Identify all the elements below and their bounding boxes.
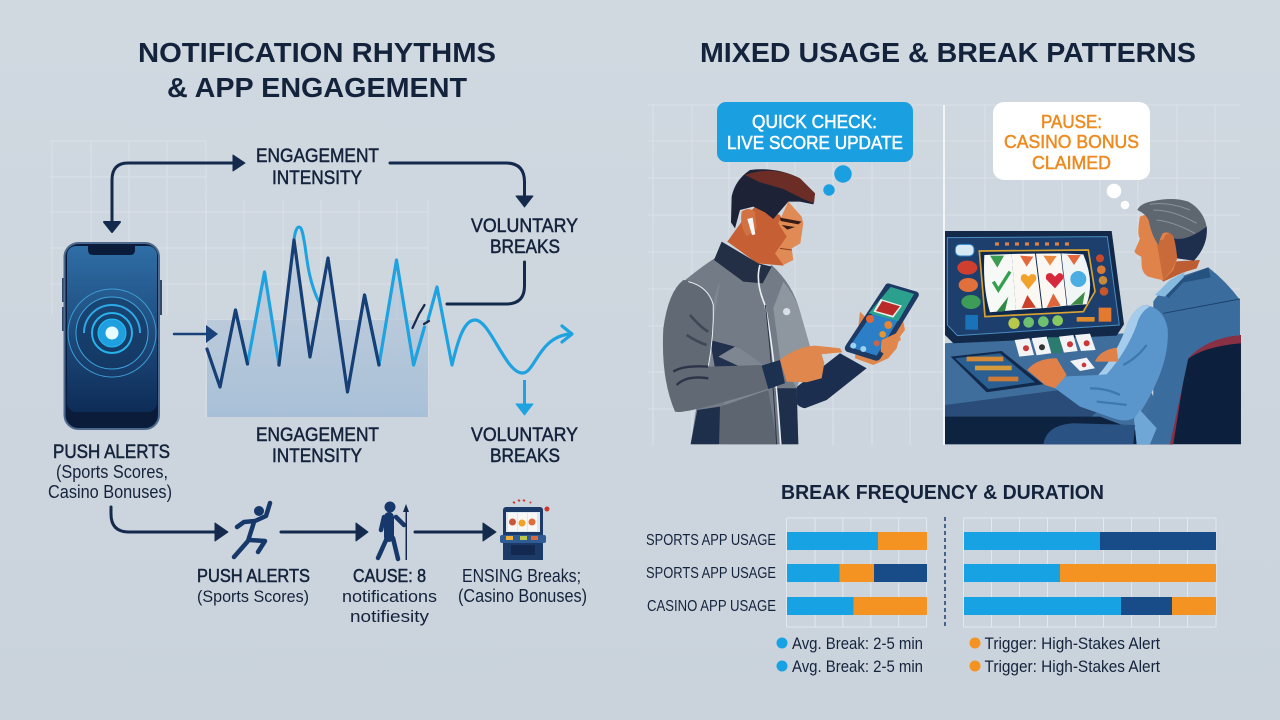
legend: average break: Avg. Break: 2-5 min xyxy=(792,634,923,653)
callout: pause casino bonus: PAUSE: xyxy=(1041,111,1102,132)
tablet keypad xyxy=(951,351,1043,392)
label: voluntary breaks top: VOLUNTARY xyxy=(471,216,578,237)
caption: push alerts: (Sports Scores) xyxy=(197,587,309,606)
caption: ensuing breaks: ENSING Breaks; xyxy=(462,566,581,586)
eyebrow and eye xyxy=(780,218,802,230)
zip xyxy=(758,265,781,444)
title: notification rhythms: & APP ENGAGEMENT xyxy=(167,72,467,103)
label: voluntary breaks top xyxy=(471,216,578,258)
face lit xyxy=(775,202,803,265)
shirt arm xyxy=(1055,305,1168,420)
caption: push alerts: PUSH ALERTS xyxy=(197,566,310,586)
caption: ensuing breaks: (Casino Bonuses) xyxy=(458,586,587,606)
far arm xyxy=(795,353,867,408)
badge xyxy=(783,308,790,315)
ear xyxy=(741,209,757,237)
label: engagement intensity bottom xyxy=(256,425,379,467)
torso xyxy=(683,255,810,444)
callout: quick check: QUICK CHECK: xyxy=(752,111,877,132)
arrow: down to voluntary breaks xyxy=(516,380,533,415)
panel grid: mixed usage backdrop xyxy=(648,105,1240,445)
face xyxy=(1134,212,1178,280)
callout: quick check xyxy=(717,102,913,196)
label: engagement intensity bottom: INTENSITY xyxy=(272,446,362,467)
chart grid: phone backdrop xyxy=(50,141,206,315)
arrow: engagement intensity to voluntary breaks xyxy=(390,163,533,207)
caption: push alerts xyxy=(197,566,310,606)
callout: pause casino bonus: CASINO BONUS xyxy=(1004,131,1139,152)
hair xyxy=(731,169,815,228)
caption: cause: notifications xyxy=(342,587,437,606)
label: push alerts under phone: Casino Bonuses) xyxy=(48,482,172,502)
icon: smartphone with alert rings xyxy=(62,243,162,429)
collar xyxy=(714,242,772,283)
hands xyxy=(1027,358,1067,388)
title: notification rhythms xyxy=(138,37,496,103)
monitor xyxy=(945,231,1124,343)
reels xyxy=(979,250,1095,317)
icon: standing person with staff xyxy=(378,502,409,560)
arrow: phone to chart xyxy=(174,325,218,343)
illustration: man checking phone xyxy=(663,169,919,444)
label: voluntary breaks bottom: VOLUNTARY xyxy=(471,425,578,446)
chair xyxy=(1167,335,1241,444)
chart grid: engagement backdrop xyxy=(206,200,428,417)
icon: slot machine xyxy=(500,500,550,560)
illustration: man at casino screen xyxy=(945,199,1241,444)
side buttons xyxy=(955,244,974,256)
arrow: alerts to runner xyxy=(111,507,228,541)
wristband xyxy=(762,360,785,389)
label: voluntary breaks top: BREAKS xyxy=(490,237,560,258)
bar chart: right duration xyxy=(964,518,1216,627)
pointing hand xyxy=(780,346,842,382)
neck and cheek xyxy=(727,207,790,266)
arrow: voluntary breaks return line xyxy=(447,262,524,304)
lower torso shade xyxy=(710,340,743,368)
bar chart: row labels: SPORTS APP USAGE xyxy=(646,565,776,582)
legend: trigger: Trigger: High-Stakes Alert xyxy=(984,657,1160,676)
icon: runner xyxy=(234,503,270,557)
bar chart: row labels xyxy=(646,532,776,615)
fingers over phone xyxy=(881,332,901,357)
legend: average break xyxy=(776,634,923,676)
bar chart: left frequency xyxy=(786,518,927,627)
label: push alerts under phone: (Sports Scores, xyxy=(56,462,168,482)
legend: trigger: Trigger: High-Stakes Alert xyxy=(984,634,1160,653)
bar chart: row labels: CASINO APP USAGE xyxy=(647,598,776,615)
label: engagement intensity top xyxy=(256,146,379,189)
callout: pause casino bonus xyxy=(993,102,1150,209)
arrow: loop from phone to engagement intensity xyxy=(104,155,245,232)
callout: pause casino bonus: CLAIMED xyxy=(1032,152,1111,173)
label: voluntary breaks bottom xyxy=(471,425,578,467)
playing cards xyxy=(1015,338,1034,357)
legend: average break: Avg. Break: 2-5 min xyxy=(792,657,923,676)
back of jacket xyxy=(1137,267,1240,444)
neck xyxy=(1157,260,1200,282)
desk xyxy=(945,333,1173,444)
label: engagement intensity top: INTENSITY xyxy=(272,168,362,189)
callout: quick check: LIVE SCORE UPDATE xyxy=(727,132,903,153)
ear xyxy=(1163,233,1174,256)
label: push alerts under phone: PUSH ALERTS xyxy=(53,442,170,463)
bar chart: row labels: SPORTS APP USAGE xyxy=(646,532,776,549)
caption: cause: CAUSE: 8 xyxy=(353,566,426,586)
divider between scenes xyxy=(943,105,945,445)
caption: cause: notifiesity xyxy=(350,607,430,626)
arrow: cause to casino xyxy=(415,523,496,541)
divider: dashed xyxy=(944,517,946,627)
hand behind phone xyxy=(855,312,905,365)
line chart: engagement intensity xyxy=(207,227,572,417)
caption: cause xyxy=(342,566,437,626)
hair xyxy=(1137,199,1207,261)
label: push alerts under phone xyxy=(48,442,172,502)
caption: ensuing breaks xyxy=(458,566,587,606)
label: engagement intensity top: ENGAGEMENT xyxy=(256,146,379,167)
legend: trigger xyxy=(970,634,1160,676)
phone xyxy=(845,283,919,361)
sleeve xyxy=(663,280,770,412)
title: notification rhythms: NOTIFICATION RHYTHMS xyxy=(138,37,496,68)
arrow: runner to cause xyxy=(281,523,368,541)
label: engagement intensity bottom: ENGAGEMENT xyxy=(256,425,379,446)
earbud xyxy=(747,218,755,235)
label: voluntary breaks bottom: BREAKS xyxy=(490,446,560,467)
heading: break frequency: BREAK FREQUENCY & DURATION xyxy=(781,481,1104,504)
title: mixed usage: MIXED USAGE & BREAK PATTERNS xyxy=(700,37,1196,68)
